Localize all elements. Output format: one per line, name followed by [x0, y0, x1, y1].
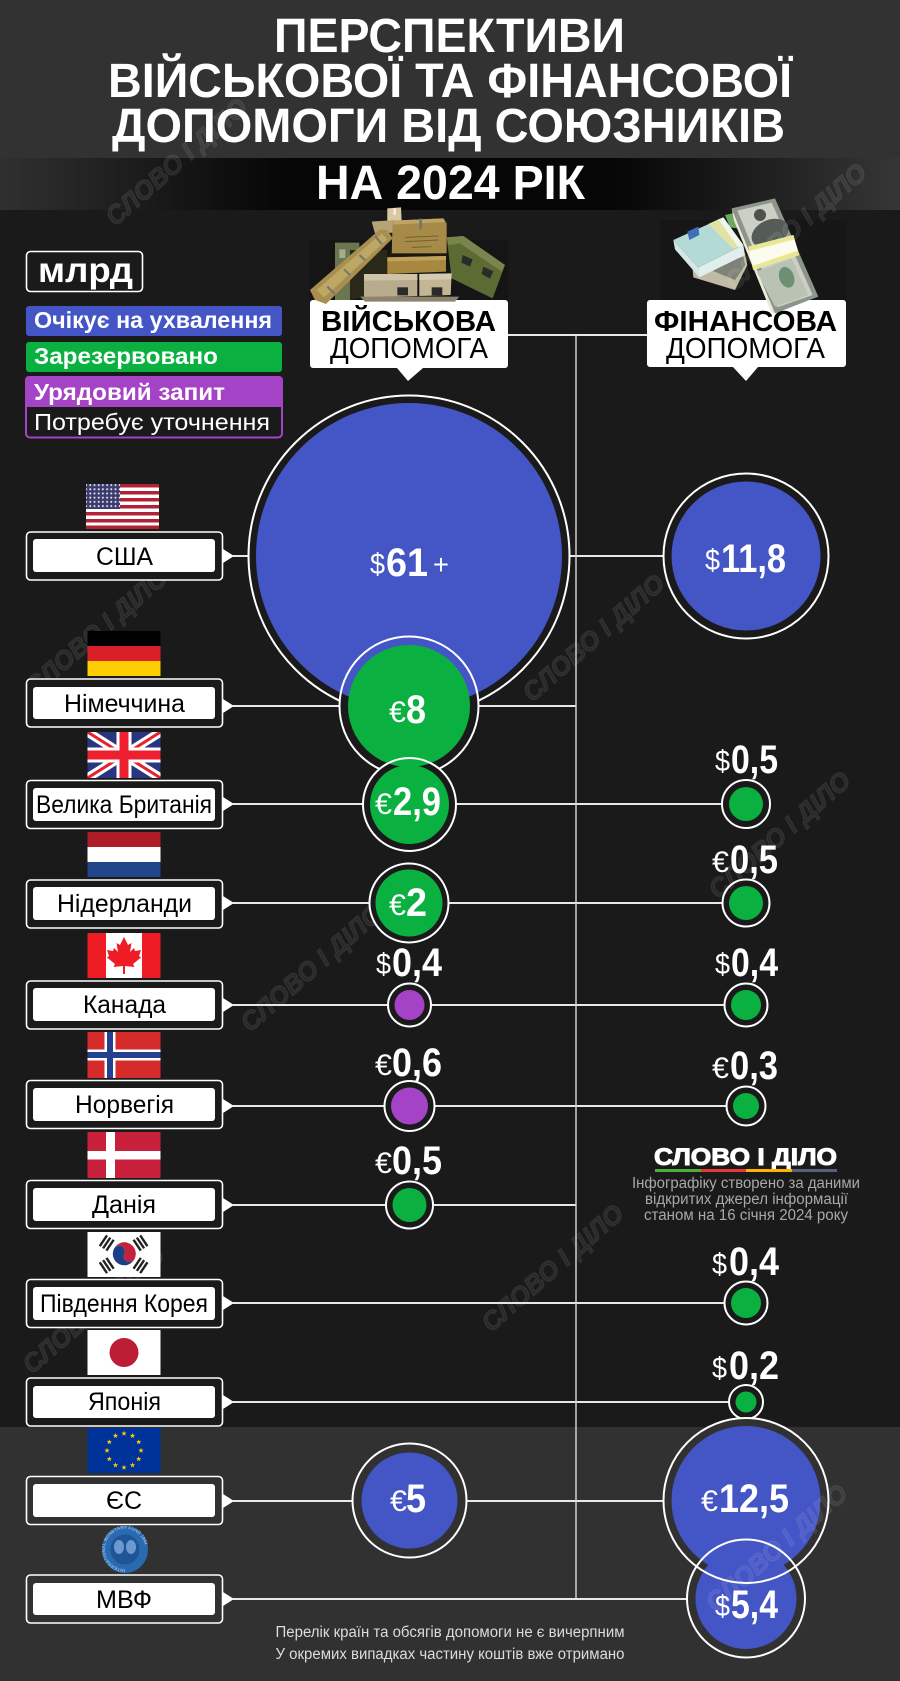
- label: Netherlands: Нідерланди: [57, 890, 192, 918]
- bubble: EU military: €: [390, 1485, 407, 1518]
- bubble: EU military: 5: [406, 1477, 426, 1521]
- watermarks behind content: СЛОВО І ДІЛО: [99, 92, 253, 232]
- label: Canada: Канада: [83, 991, 166, 1019]
- label: United Kingdom: [26, 780, 234, 828]
- watermarks behind content: СЛОВО І ДІЛО: [516, 568, 670, 708]
- row: Germany: [26, 631, 234, 727]
- bubble: USA military: +: [433, 549, 449, 580]
- row: Denmark: [26, 1132, 234, 1228]
- bubble: Denmark military: 0,5: [392, 1139, 442, 1183]
- bubble: Canada financial: [715, 941, 779, 1026]
- bubble: South Korea financial: [712, 1240, 780, 1324]
- label: South Korea: [26, 1280, 234, 1328]
- bubble: Canada military: [376, 941, 443, 1026]
- bubble: Japan financial: [712, 1344, 779, 1419]
- bubble: Denmark military: €: [375, 1147, 392, 1180]
- bubble: Germany military: [338, 636, 480, 770]
- bubble: Netherlands military: 2: [406, 881, 427, 925]
- row: United Kingdom: [26, 732, 234, 828]
- row: IMF: [26, 1526, 234, 1624]
- bubble: Norway financial: [712, 1044, 778, 1126]
- label: Germany: [26, 679, 234, 727]
- bubble: Canada military: 0,4: [392, 941, 443, 985]
- watermarks behind content: СЛОВО І ДІЛО: [16, 1240, 170, 1380]
- bubble: USA financial: [664, 474, 828, 638]
- row: Japan: [26, 1330, 234, 1426]
- source note: [632, 1175, 860, 1224]
- column header: military aid: [310, 300, 508, 381]
- bubble: Germany military: €: [389, 696, 406, 729]
- bubble: UK military: 2,9: [393, 780, 441, 824]
- row: USA: [26, 484, 234, 580]
- legend: government request / needs clarification: [25, 376, 283, 438]
- connector lines: [233, 335, 740, 1599]
- flag: Norway: [88, 1032, 160, 1078]
- bubble: Germany military: 8: [406, 688, 426, 732]
- bubbles: EU and IMF financial: 12,5: [719, 1477, 789, 1521]
- row: Canada: [26, 933, 234, 1029]
- bubbles: EU and IMF financial: $: [715, 1590, 730, 1623]
- label: Germany: Німеччина: [64, 690, 185, 718]
- legend: government request / needs clarification: Потребує уточнення: [34, 409, 270, 435]
- flag: South Korea: [88, 1232, 160, 1277]
- bubble: UK financial: [715, 738, 778, 828]
- bubble: Canada military: $: [376, 948, 391, 981]
- watermarks behind content: [16, 92, 670, 1380]
- header background: [0, 0, 900, 158]
- column header: military aid: ДОПОМОГА: [330, 333, 489, 365]
- bubble: Netherlands military: [370, 864, 448, 942]
- icon: military crates: [309, 207, 508, 304]
- label: Denmark: Данія: [92, 1191, 156, 1219]
- logo: IMF: INTERNATIONAL MONETARY FUND 1944: [102, 1526, 148, 1572]
- bubble: Norway military: [375, 1041, 442, 1131]
- bubble: Netherlands military: €: [389, 889, 406, 922]
- label: Canada: [26, 981, 234, 1029]
- lower section background: [0, 1427, 900, 1681]
- label: South Korea: Південня Корея: [40, 1290, 208, 1318]
- flag: EU: [88, 1428, 160, 1473]
- watermarks above content: СЛОВО І ДІЛО: [699, 1478, 853, 1618]
- column header: financial aid: ДОПОМОГА: [666, 333, 826, 365]
- bubble: UK financial: 0,5: [731, 738, 778, 782]
- year band background: [0, 158, 900, 210]
- row: EU: [26, 1428, 234, 1524]
- bubble: USA military: [248, 396, 570, 716]
- bubble: UK financial: $: [715, 745, 730, 778]
- bubble: USA financial: $: [705, 544, 720, 577]
- bubble: Norway financial: 0,3: [730, 1044, 778, 1088]
- label: Japan: [26, 1378, 234, 1426]
- label: EU: [26, 1476, 234, 1524]
- watermarks above content: [699, 157, 872, 1618]
- label: USA: США: [96, 543, 153, 571]
- title: ВІЙСЬКОВОЇ ТА ФІНАНСОВОЇ: [108, 53, 794, 108]
- icon: money stacks: [660, 198, 847, 313]
- footnote: [276, 1624, 624, 1663]
- bubble: Canada financial: $: [715, 948, 730, 981]
- watermarks above content: СЛОВО І ДІЛО: [702, 765, 856, 905]
- legend: government request / needs clarification: Урядовий запит: [34, 379, 225, 405]
- bubble: UK military: [362, 757, 457, 852]
- column header: financial aid: [647, 300, 846, 381]
- bubble: Norway financial: €: [712, 1052, 729, 1085]
- footnote: У окремих випадках частину коштів вже отримано: [276, 1646, 624, 1663]
- flag: USA: [86, 484, 159, 529]
- label: USA: [26, 532, 234, 580]
- source note: відкритих джерел інформації: [645, 1191, 849, 1208]
- legend: [25, 251, 283, 438]
- flag: Japan: [88, 1330, 160, 1375]
- unit badge: млрд: [38, 251, 133, 290]
- flag: Canada: [88, 933, 160, 978]
- bubble: South Korea financial: 0,4: [729, 1240, 780, 1284]
- label: Norway: [26, 1080, 234, 1128]
- bubble: South Korea financial: $: [712, 1248, 727, 1281]
- bubble: Canada financial: 0,4: [731, 941, 779, 985]
- title: ПЕРСПЕКТИВИ: [274, 10, 625, 63]
- title: ДОПОМОГИ ВІД СОЮЗНИКІВ: [112, 100, 785, 153]
- watermarks behind content: СЛОВО І ДІЛО: [234, 898, 388, 1038]
- bubble: Denmark military: [375, 1139, 442, 1228]
- label: Japan: Японія: [88, 1388, 161, 1416]
- flag: Denmark: [88, 1132, 160, 1178]
- label: IMF: МВФ: [96, 1586, 152, 1614]
- bubbles: EU and IMF financial: €: [701, 1485, 718, 1518]
- row: Netherlands: [26, 832, 234, 928]
- legend: reserved: Зарезервовано: [34, 343, 218, 369]
- flag: United Kingdom: [88, 732, 160, 778]
- bubble: Netherlands financial: [712, 838, 778, 926]
- logo: Slovo i Dilo: СЛОВО І ДІЛО: [654, 1144, 837, 1171]
- legend: awaiting approval: Очікує на ухвалення: [34, 307, 272, 333]
- legend: reserved: [26, 342, 282, 372]
- bubbles: EU and IMF financial: [664, 1418, 828, 1658]
- bubble: Japan financial: 0,2: [729, 1344, 779, 1388]
- watermarks behind content: СЛОВО І ДІЛО: [19, 562, 173, 702]
- bubble: Netherlands financial: €: [712, 846, 729, 879]
- bubble: USA military: $: [370, 548, 385, 581]
- bubble: Norway military: €: [375, 1049, 392, 1082]
- label: Norway: Норвегія: [75, 1091, 174, 1119]
- watermarks behind content: СЛОВО І ДІЛО: [475, 1198, 629, 1338]
- bubble: Norway military: 0,6: [392, 1041, 442, 1085]
- bubble: USA military: 61: [386, 541, 428, 585]
- bubble: UK military: €: [375, 788, 392, 821]
- bubble: Netherlands financial: 0,5: [730, 838, 778, 882]
- label: United Kingdom: Велика Британія: [36, 791, 212, 819]
- flag: Netherlands: [88, 832, 160, 877]
- flag: Germany: [88, 631, 160, 676]
- source note: станом на 16 січня 2024 року: [644, 1207, 848, 1224]
- row: South Korea: [26, 1232, 234, 1328]
- subtitle: year: НА 2024 РІК: [316, 157, 586, 210]
- label: Denmark: [26, 1180, 234, 1228]
- bubble: USA financial: 11,8: [721, 537, 786, 581]
- source note: Інфографіку створено за даними: [632, 1175, 860, 1192]
- label: Netherlands: [26, 880, 234, 928]
- label: IMF: [26, 1575, 234, 1623]
- row: Norway: [26, 1032, 234, 1128]
- footnote: Перелік країн та обсягів допомоги не є вичерпним: [276, 1624, 624, 1641]
- label: EU: ЄС: [106, 1487, 142, 1515]
- title: [108, 10, 794, 153]
- bubbles: EU and IMF financial: 5,4: [731, 1583, 779, 1627]
- bubble: Japan financial: $: [712, 1352, 727, 1385]
- column header: military aid: ВІЙСЬКОВА: [321, 304, 496, 338]
- watermarks above content: СЛОВО І ДІЛО: [718, 157, 872, 297]
- bubble: EU military: [352, 1444, 466, 1558]
- column header: financial aid: ФІНАНСОВА: [654, 306, 837, 338]
